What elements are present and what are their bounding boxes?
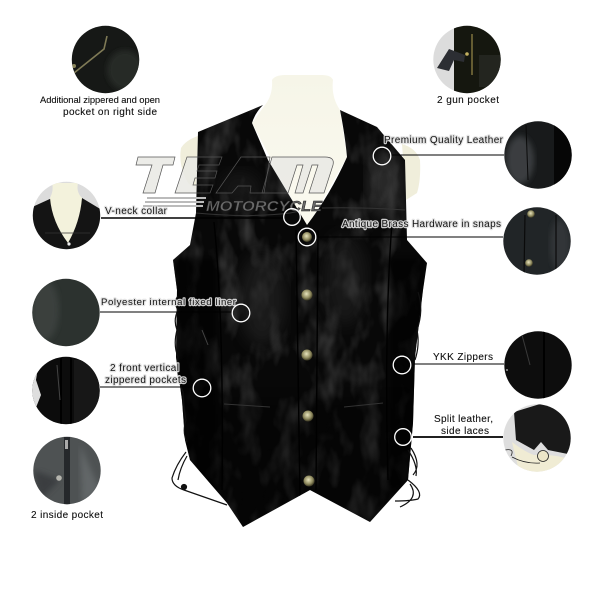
label: brass hardware: Antique Brass Hardware in snaps <box>342 219 501 230</box>
vest <box>170 100 430 530</box>
thumbnail: brass hardware <box>503 207 571 275</box>
label: split leather: side laces <box>441 426 489 437</box>
label: premium leather: Premium Quality Leather <box>384 135 504 146</box>
label: ykk zippers: YKK Zippers <box>433 352 493 363</box>
side laces and strings <box>172 292 421 507</box>
thumbnail: polyester liner <box>32 278 100 346</box>
watermark logo <box>136 157 333 215</box>
mannequin <box>180 75 420 228</box>
label: front zippered pockets: zippered pockets <box>105 375 186 386</box>
label: front zippered pockets: 2 front vertical <box>110 363 179 374</box>
label: front zippered pockets <box>105 363 186 386</box>
label: additional pocket: Additional zippered and open <box>40 94 160 105</box>
label: additional pocket <box>40 94 160 118</box>
label: v-neck collar: V-neck collar <box>105 206 168 217</box>
thumbnail: front zippered pockets <box>32 356 100 424</box>
thumbnail: v-neck collar <box>32 182 100 250</box>
callout lines <box>100 155 504 437</box>
logo text: motorcycle: MOTORCYCLE <box>206 198 323 215</box>
callout circles on vest <box>193 147 411 445</box>
thumbnail: gun pocket <box>433 26 501 94</box>
label: inside pocket: 2 inside pocket <box>31 510 103 521</box>
label: split leather <box>434 414 493 437</box>
logo fill behind vest <box>136 157 333 193</box>
brass snap buttons <box>302 232 314 486</box>
thumbnail: premium leather <box>504 121 572 189</box>
thumbnail: inside pocket <box>33 436 101 504</box>
label: gun pocket: 2 gun pocket <box>437 95 499 106</box>
thumbnail: ykk zippers <box>504 331 572 399</box>
thumbnail: split leather laces <box>503 404 571 472</box>
thumbnail: zippered pocket <box>72 26 140 94</box>
label: split leather: Split leather, <box>434 414 493 425</box>
label: additional pocket: pocket on right side <box>63 107 157 118</box>
label: polyester liner: Polyester internal fixed liner <box>101 297 237 308</box>
